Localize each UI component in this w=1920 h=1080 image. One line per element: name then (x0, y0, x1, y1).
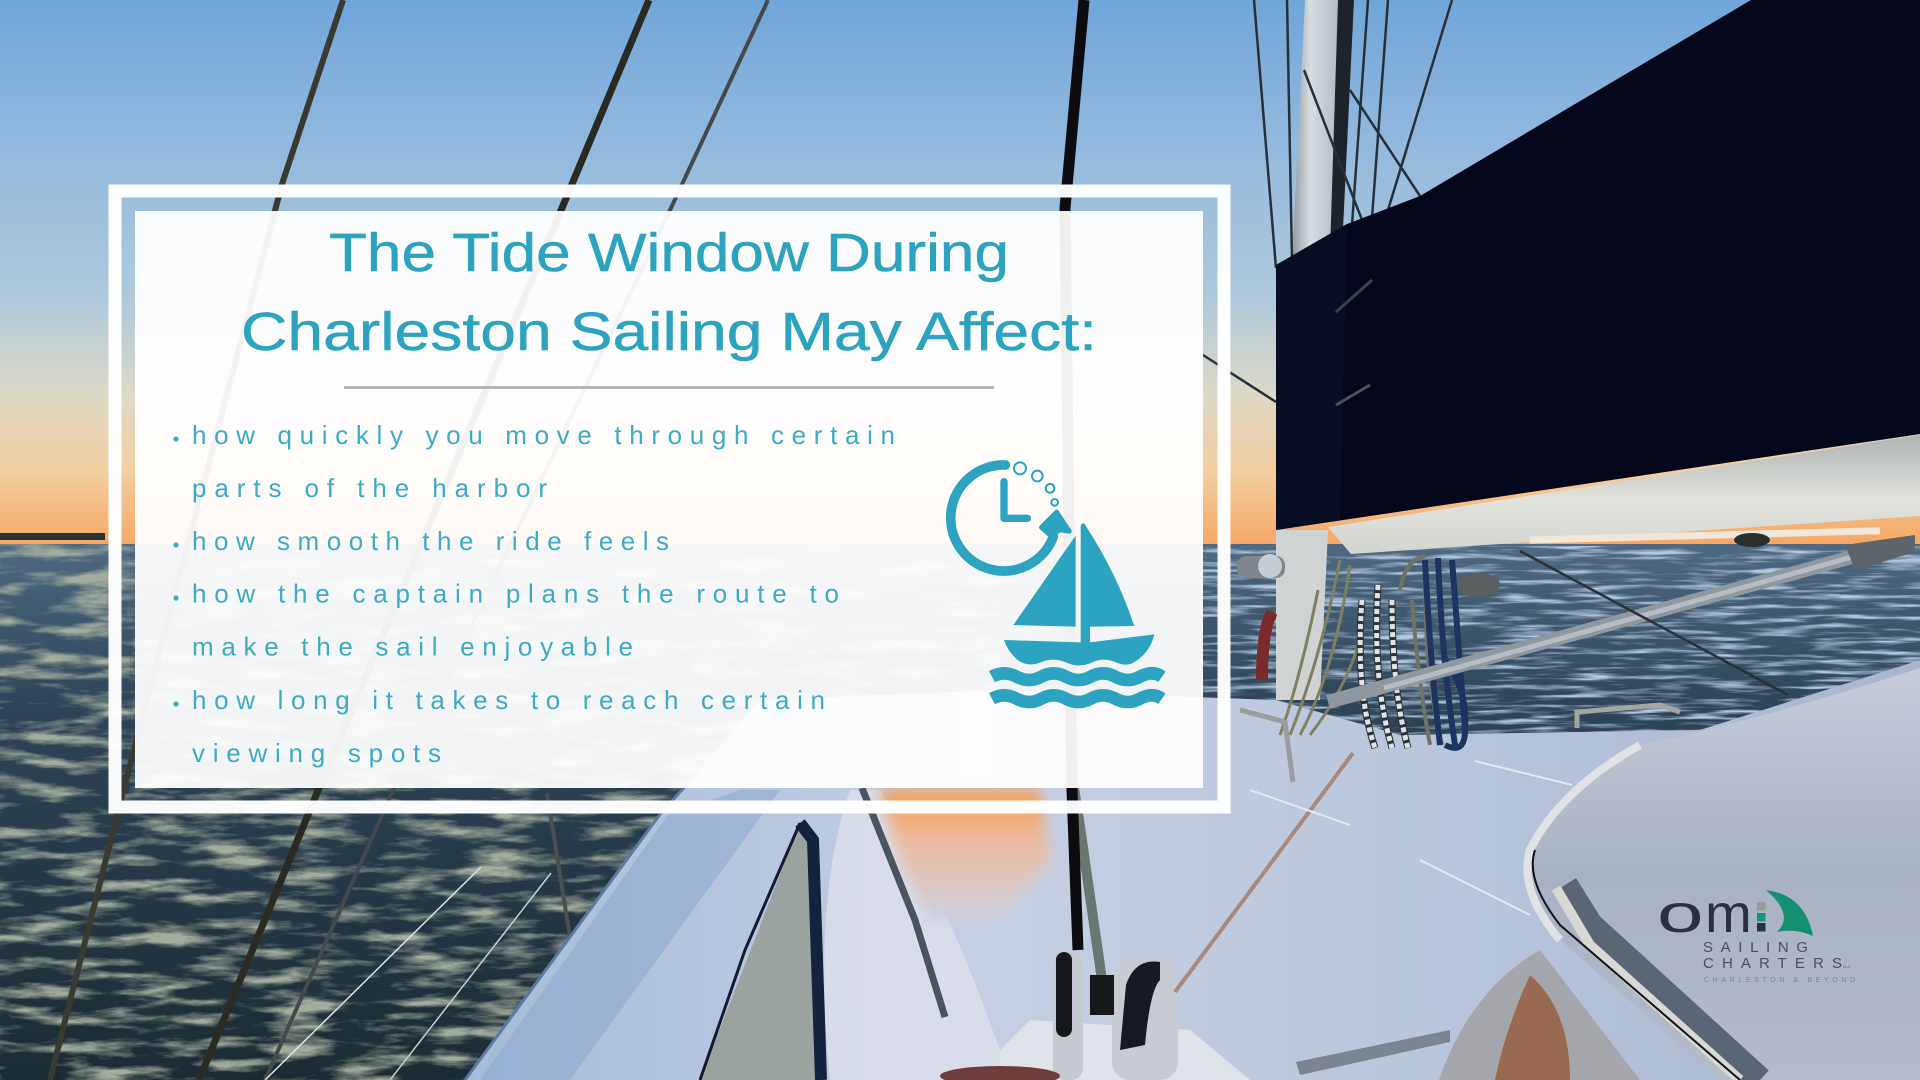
furled mainsail cover (1276, 0, 1920, 530)
bullet 2: how smooth the ride feels (192, 526, 669, 556)
bullet 3 (173, 578, 839, 662)
cabin window (1439, 950, 1640, 1080)
deck rope (1175, 753, 1353, 992)
icon: clock arc (951, 465, 1053, 571)
logo wordmark m: m (1705, 883, 1752, 944)
logo squares (1757, 902, 1766, 932)
icon: waves (992, 673, 1162, 702)
icon: hull (1004, 634, 1154, 665)
stern rail (1577, 705, 1680, 728)
ropes and hardware at mast base (1237, 554, 1500, 748)
bullet 4: how long it takes to reach certain (192, 685, 825, 715)
bullet 4: viewing spots (192, 738, 441, 768)
bullet 1: how quickly you move through certain (192, 420, 895, 450)
icon: arrow head (1041, 512, 1069, 537)
deck seam lines (1250, 761, 1572, 915)
boom (1328, 435, 1920, 554)
bullet 1: parts of the harbor (192, 473, 547, 503)
handrail (862, 788, 945, 1017)
logo text (1703, 939, 1855, 984)
track and winches (940, 0, 1250, 1080)
divider (344, 386, 994, 389)
panel: translucent content card (135, 211, 1203, 788)
logo wordmark: o (1657, 883, 1704, 944)
spinnaker pole strut (1328, 535, 1915, 702)
icon: clock with arrow above sailboat on waves (951, 462, 1162, 702)
stay wire over water (1520, 551, 1788, 695)
bullet 1 (173, 420, 895, 503)
sunset reflection on deck (880, 790, 1050, 920)
bullet list (173, 420, 895, 768)
icon: progress dots (1014, 462, 1058, 506)
bullet 3: how the captain plans the route to (192, 578, 839, 608)
logo text: CHARTERS (1703, 955, 1842, 972)
bullet 3: make the sail enjoyable (192, 632, 633, 662)
logo fin (1766, 890, 1813, 936)
hatch window (700, 823, 821, 1080)
water (0, 544, 1920, 1080)
distant shoreline (0, 533, 105, 540)
deck edge shadow (465, 770, 700, 1080)
bullet 4 (173, 685, 825, 768)
chrome handle (1533, 850, 1760, 1080)
sky (0, 0, 1920, 546)
coachroof bulge (824, 790, 1010, 1080)
logo text: LLC (1843, 964, 1850, 969)
logo text: SAILING (1703, 939, 1808, 956)
panel: white outer frame (115, 191, 1224, 807)
logo text: CHARLESTON & BEYOND (1704, 977, 1855, 984)
cabin top (1527, 668, 1920, 1080)
mast shrouds (1203, 0, 1452, 402)
title (241, 223, 1097, 362)
icon: clock hands (1004, 482, 1027, 518)
deck (465, 660, 1920, 1080)
rigging lines left (50, 0, 768, 1080)
logo: OMI Sailing Charters (1657, 883, 1855, 984)
title: Charleston Sailing May Affect: (241, 302, 1097, 362)
lower deck fitting (1296, 1030, 1450, 1075)
title: The Tide Window During (329, 223, 1009, 283)
icon: sails and mast (1013, 523, 1134, 643)
mast (1276, 0, 1354, 700)
